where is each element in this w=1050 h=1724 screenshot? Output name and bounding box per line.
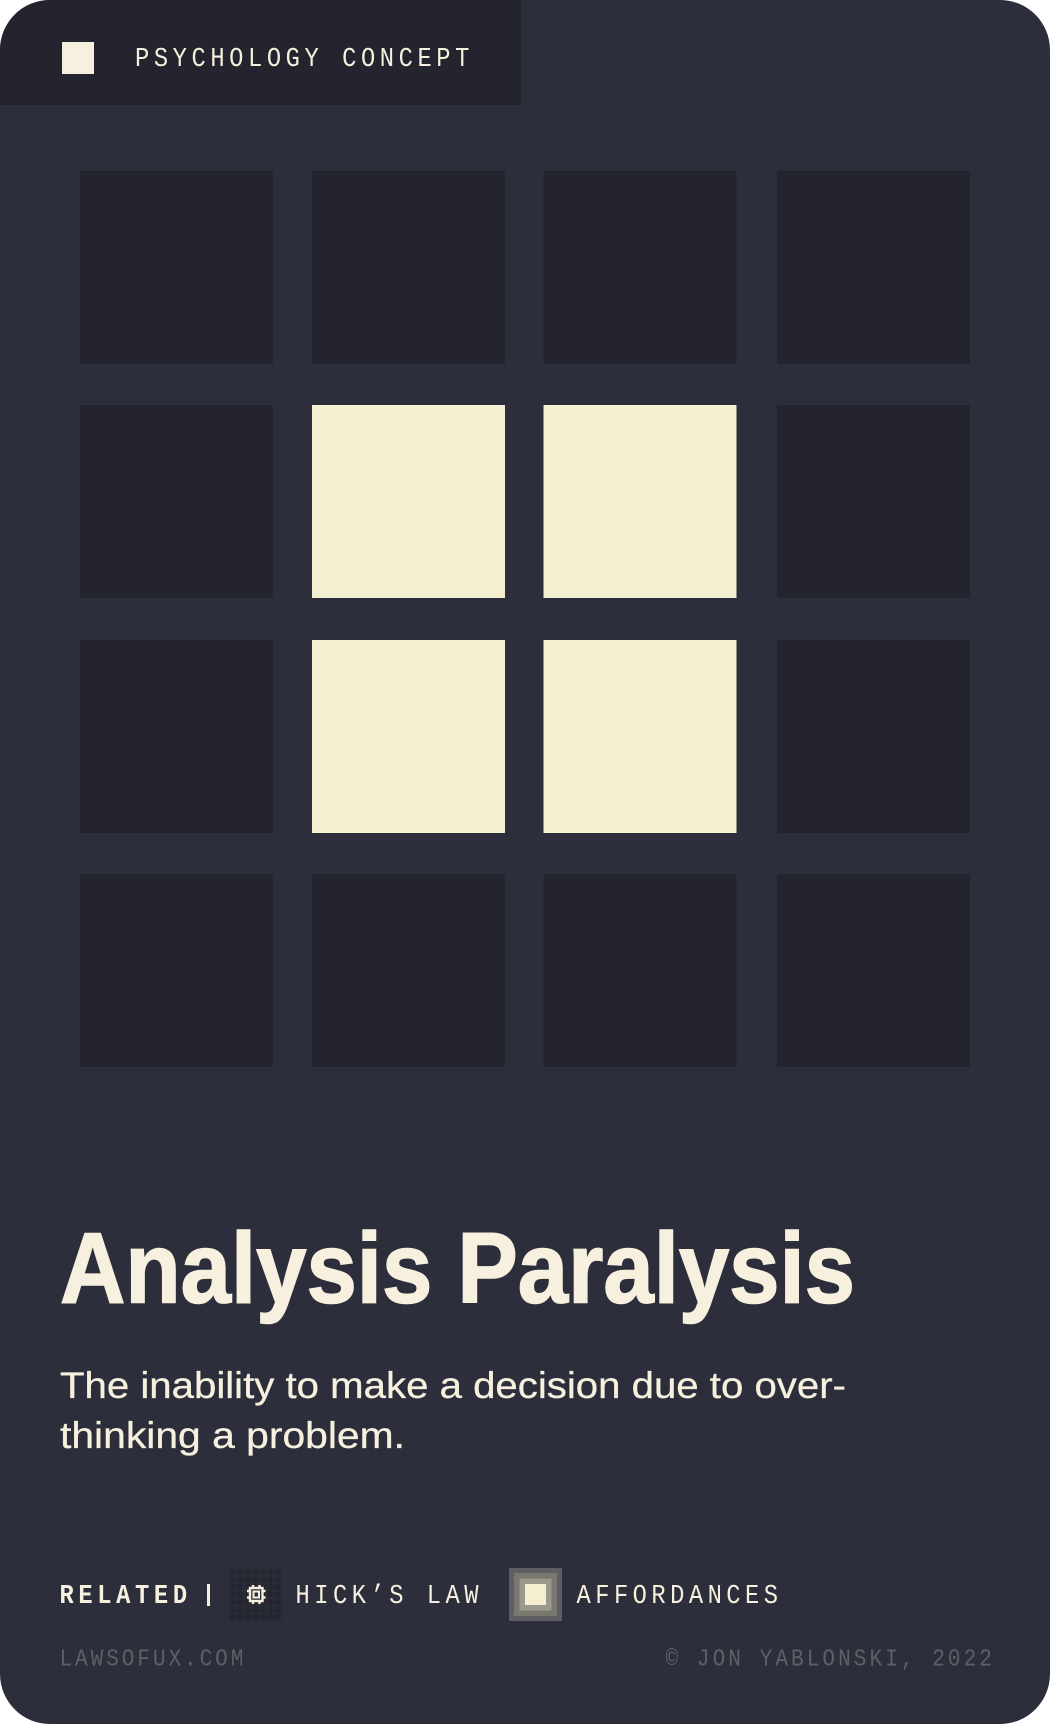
title: Analysis Paralysis	[60, 1212, 855, 1324]
icon: hick's law chip tile	[229, 1568, 282, 1621]
description: The inability to make a decision due to over-	[60, 1365, 846, 1406]
footer credit: © JON YABLONSKI, 2022	[666, 1645, 992, 1673]
tile grid illustration	[80, 171, 970, 1067]
affordances label: AFFORDANCES	[576, 1581, 778, 1611]
icon: header square	[62, 42, 94, 74]
icon: affordances nested squares	[509, 1568, 562, 1621]
description	[60, 1365, 846, 1456]
hick's law label: HICK’S LAW	[296, 1581, 479, 1611]
header label: PSYCHOLOGY CONCEPT	[135, 44, 469, 74]
related separator	[207, 1584, 210, 1606]
header band	[0, 0, 521, 105]
related label: RELATED	[60, 1581, 187, 1611]
footer site: LAWSOFUX.COM	[60, 1645, 243, 1673]
description: thinking a problem.	[60, 1415, 405, 1456]
